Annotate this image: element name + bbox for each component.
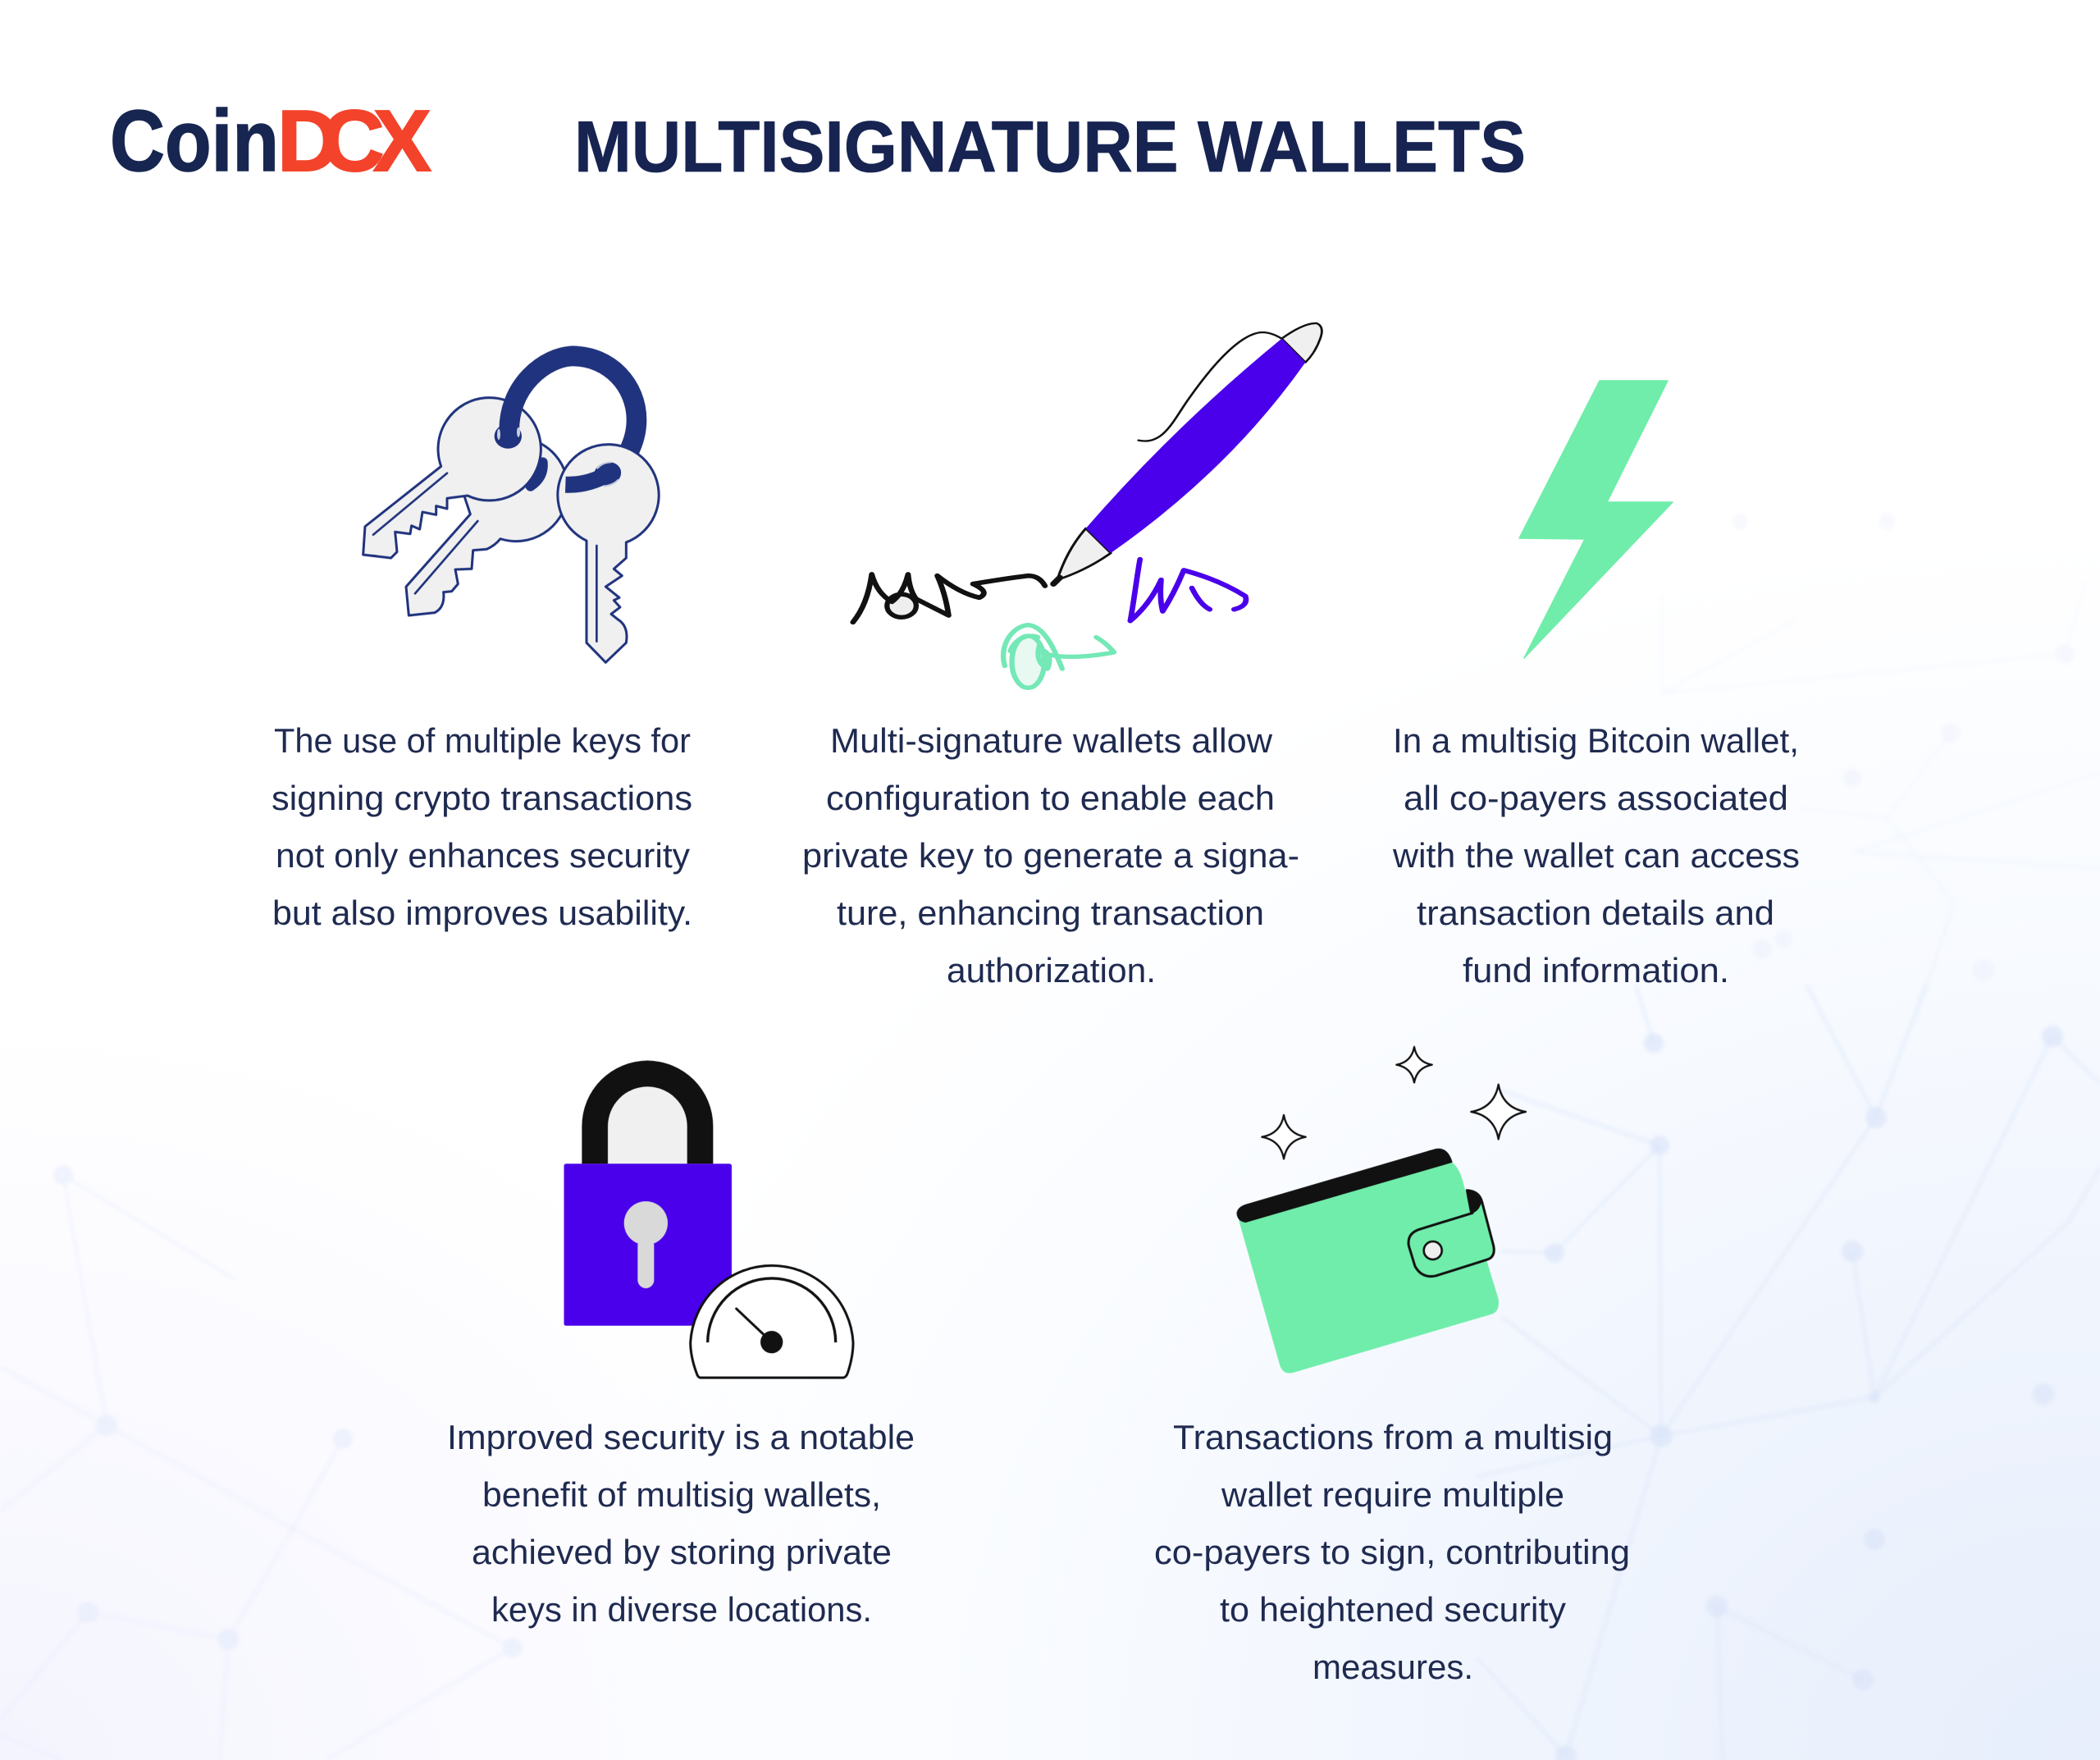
text: improved security	[447, 1418, 915, 1629]
icon: wallet with sparkles	[1237, 1047, 1526, 1374]
text: improved security: Improved security is a notable	[447, 1418, 915, 1456]
text: multiple keys	[272, 721, 692, 932]
text: multiple keys: not only enhances security	[276, 836, 690, 875]
text: multiple co-payers	[1154, 1418, 1630, 1686]
logo: CoinDCX: DCX	[277, 93, 431, 190]
text: improved security: benefit of multisig wallets,	[482, 1475, 881, 1514]
text: configuration: configuration to enable each	[826, 779, 1275, 817]
logo: CoinDCX: Coin	[110, 93, 279, 190]
text: co-payers access: In a multisig Bitcoin wallet,	[1393, 721, 1799, 760]
text: multiple co-payers: co-payers to sign, contributing	[1154, 1533, 1630, 1571]
text: co-payers access: with the wallet can access	[1392, 836, 1800, 875]
icon: keys on a ring	[363, 356, 659, 662]
text: multiple keys: signing crypto transactions	[272, 779, 692, 817]
text: co-payers access: transaction details and	[1417, 894, 1774, 932]
text: configuration: Multi-signature wallets allow	[830, 721, 1273, 760]
icon: pen and signatures	[853, 323, 1322, 688]
text: multiple co-payers: wallet require multiple	[1221, 1475, 1564, 1514]
text: configuration	[802, 721, 1299, 990]
text: configuration: private key to generate a signa-	[802, 836, 1299, 875]
text: improved security: keys in diverse locations.	[491, 1590, 872, 1629]
text: co-payers access: fund information.	[1463, 951, 1729, 990]
title: MULTISIGNATURE WALLETS	[574, 106, 1526, 187]
icon: lightning bolt	[1519, 381, 1673, 658]
text: improved security: achieved by storing private	[472, 1533, 892, 1571]
text: multiple co-payers: Transactions from a multisig	[1173, 1418, 1613, 1456]
text: multiple co-payers: measures.	[1312, 1648, 1473, 1686]
icon: padlock and gauge	[564, 1061, 853, 1378]
text: multiple co-payers: to heightened security	[1220, 1590, 1566, 1629]
text: multiple keys: but also improves usability.	[272, 894, 692, 932]
text: co-payers access: all co-payers associated	[1404, 779, 1788, 817]
text: configuration: authorization.	[947, 951, 1156, 990]
text: multiple keys: The use of multiple keys for	[274, 721, 691, 760]
text: configuration: ture, enhancing transaction	[837, 894, 1264, 932]
text: co-payers access	[1392, 721, 1800, 990]
logo: CoinDCX	[110, 93, 431, 190]
